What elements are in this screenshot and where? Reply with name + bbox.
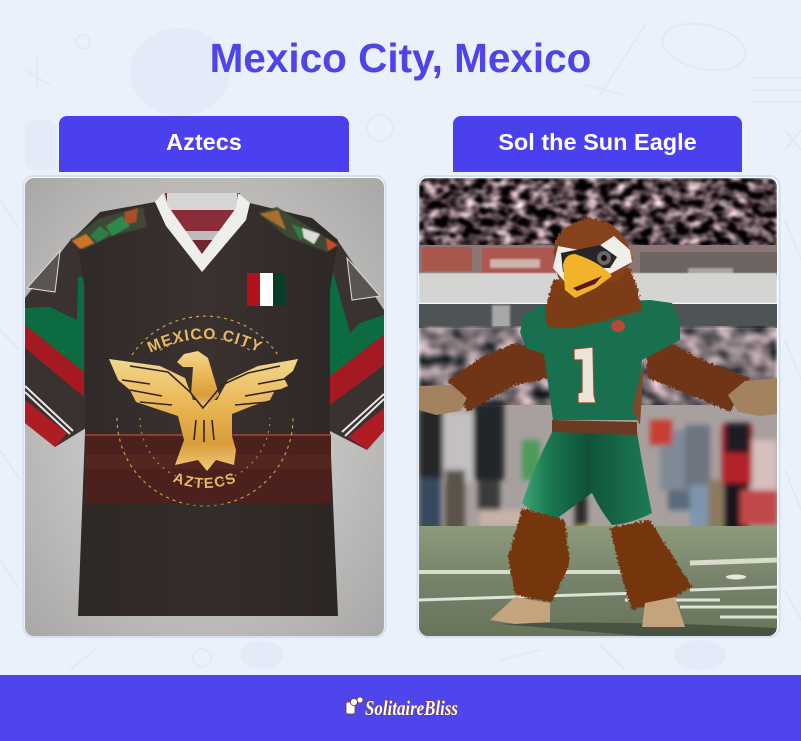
- background people: [419, 402, 777, 543]
- heading tab: Aztecs: Aztecs: [166, 129, 242, 155]
- mascot arms: [448, 336, 750, 412]
- mascot neck feathers: [545, 268, 642, 328]
- mascot photo: [419, 178, 777, 636]
- golden eagle emblem: [109, 351, 298, 471]
- panel: Aztecs jersey: [22, 116, 386, 638]
- mascot feet: [490, 597, 685, 627]
- jersey photo: [25, 178, 384, 636]
- title: Mexico City, Mexico: [210, 35, 591, 81]
- heading tab: Sol the Sun Eagle: Sol the Sun Eagle: [498, 129, 697, 155]
- emblem text: Mexico City: MEXICO CITY: [146, 328, 263, 352]
- footer bar: [0, 675, 801, 741]
- emblem text: Aztecs: AZTECS: [172, 473, 235, 488]
- Mexican flag patch: [247, 273, 285, 306]
- football field: [419, 526, 777, 636]
- heading tab: Sol the Sun Eagle: [453, 116, 742, 172]
- logo icon: cards: [346, 697, 363, 714]
- mascot jersey: [520, 300, 680, 425]
- mascot head: [553, 218, 632, 298]
- mascot belt: [552, 420, 637, 435]
- wood stripe: [85, 434, 331, 503]
- heading tab: Aztecs: [59, 116, 349, 172]
- logo text: SolitaireBliss: [365, 696, 458, 720]
- dashed emblem circle: [117, 316, 293, 506]
- photo card frame: [418, 176, 780, 637]
- jersey sleeves: [25, 238, 384, 450]
- floral shoulder patterns: [70, 207, 338, 252]
- mascot fur legs: [508, 508, 692, 610]
- stadium background: [419, 178, 777, 535]
- panel: Sol the Sun Eagle mascot: [418, 116, 780, 637]
- mascot hands: [419, 378, 777, 416]
- eagle feather lines: [122, 366, 290, 442]
- mascot pants: [522, 432, 652, 525]
- photo card frame: [24, 176, 386, 637]
- jersey lower shadow: [78, 503, 338, 616]
- logo: Solitaire Bliss: [346, 696, 458, 720]
- jersey body: [76, 202, 338, 616]
- collar: [155, 193, 250, 272]
